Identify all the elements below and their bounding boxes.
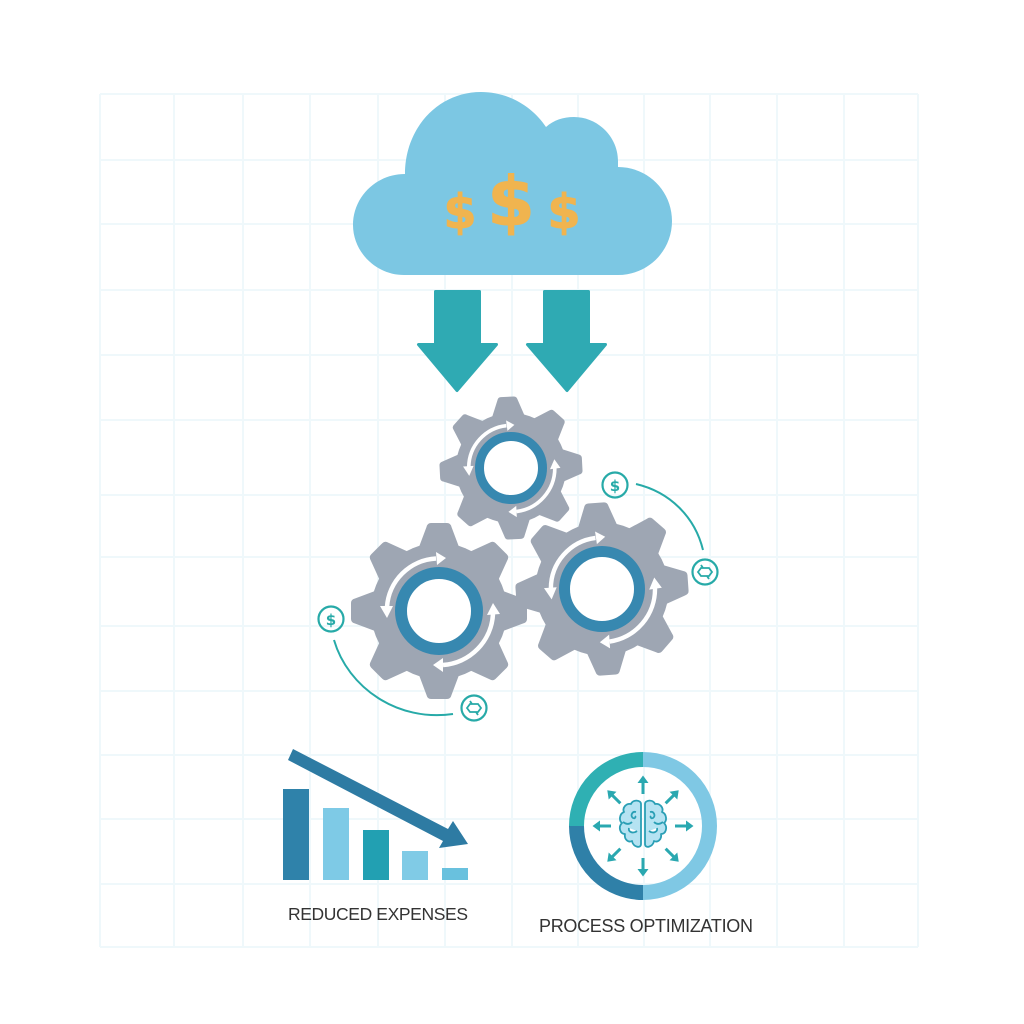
cycle connector: right (602, 472, 718, 584)
icon: process badge left (462, 696, 486, 720)
bars (283, 789, 468, 880)
cloud with dollar signs (353, 92, 672, 275)
label: process optimization: PROCESS OPTIMIZATION (539, 916, 753, 936)
donut ring (576, 760, 710, 892)
process optimization donut (576, 760, 710, 892)
arrow: downward trend (288, 749, 468, 848)
icon: brain (620, 801, 666, 847)
background grid (100, 94, 918, 947)
icon: process badge right (692, 560, 718, 584)
gear ring: right (564, 552, 640, 626)
gear: left (351, 523, 527, 699)
dollar signs: $ (487, 163, 535, 242)
dollar signs: $ (547, 185, 581, 240)
radial arrows (592, 776, 694, 876)
icon: dollar badge left: $ (326, 611, 336, 629)
dollar signs (443, 163, 581, 242)
connector arc left (334, 640, 453, 715)
gear ring: top (480, 436, 542, 500)
icon: dollar badge right: $ (610, 477, 620, 495)
connector arc right (636, 484, 703, 550)
gear ring: left (401, 573, 477, 649)
dollar signs: $ (443, 185, 477, 240)
cycle connector: left (318, 606, 486, 720)
gear: top (436, 393, 586, 543)
label: reduced expenses: REDUCED EXPENSES (288, 904, 468, 924)
bar chart: reduced expenses (283, 749, 468, 880)
cloud shape (353, 92, 672, 275)
gear: right (510, 497, 694, 681)
icon: dollar badge left (318, 606, 344, 632)
downward arrows (418, 292, 606, 390)
